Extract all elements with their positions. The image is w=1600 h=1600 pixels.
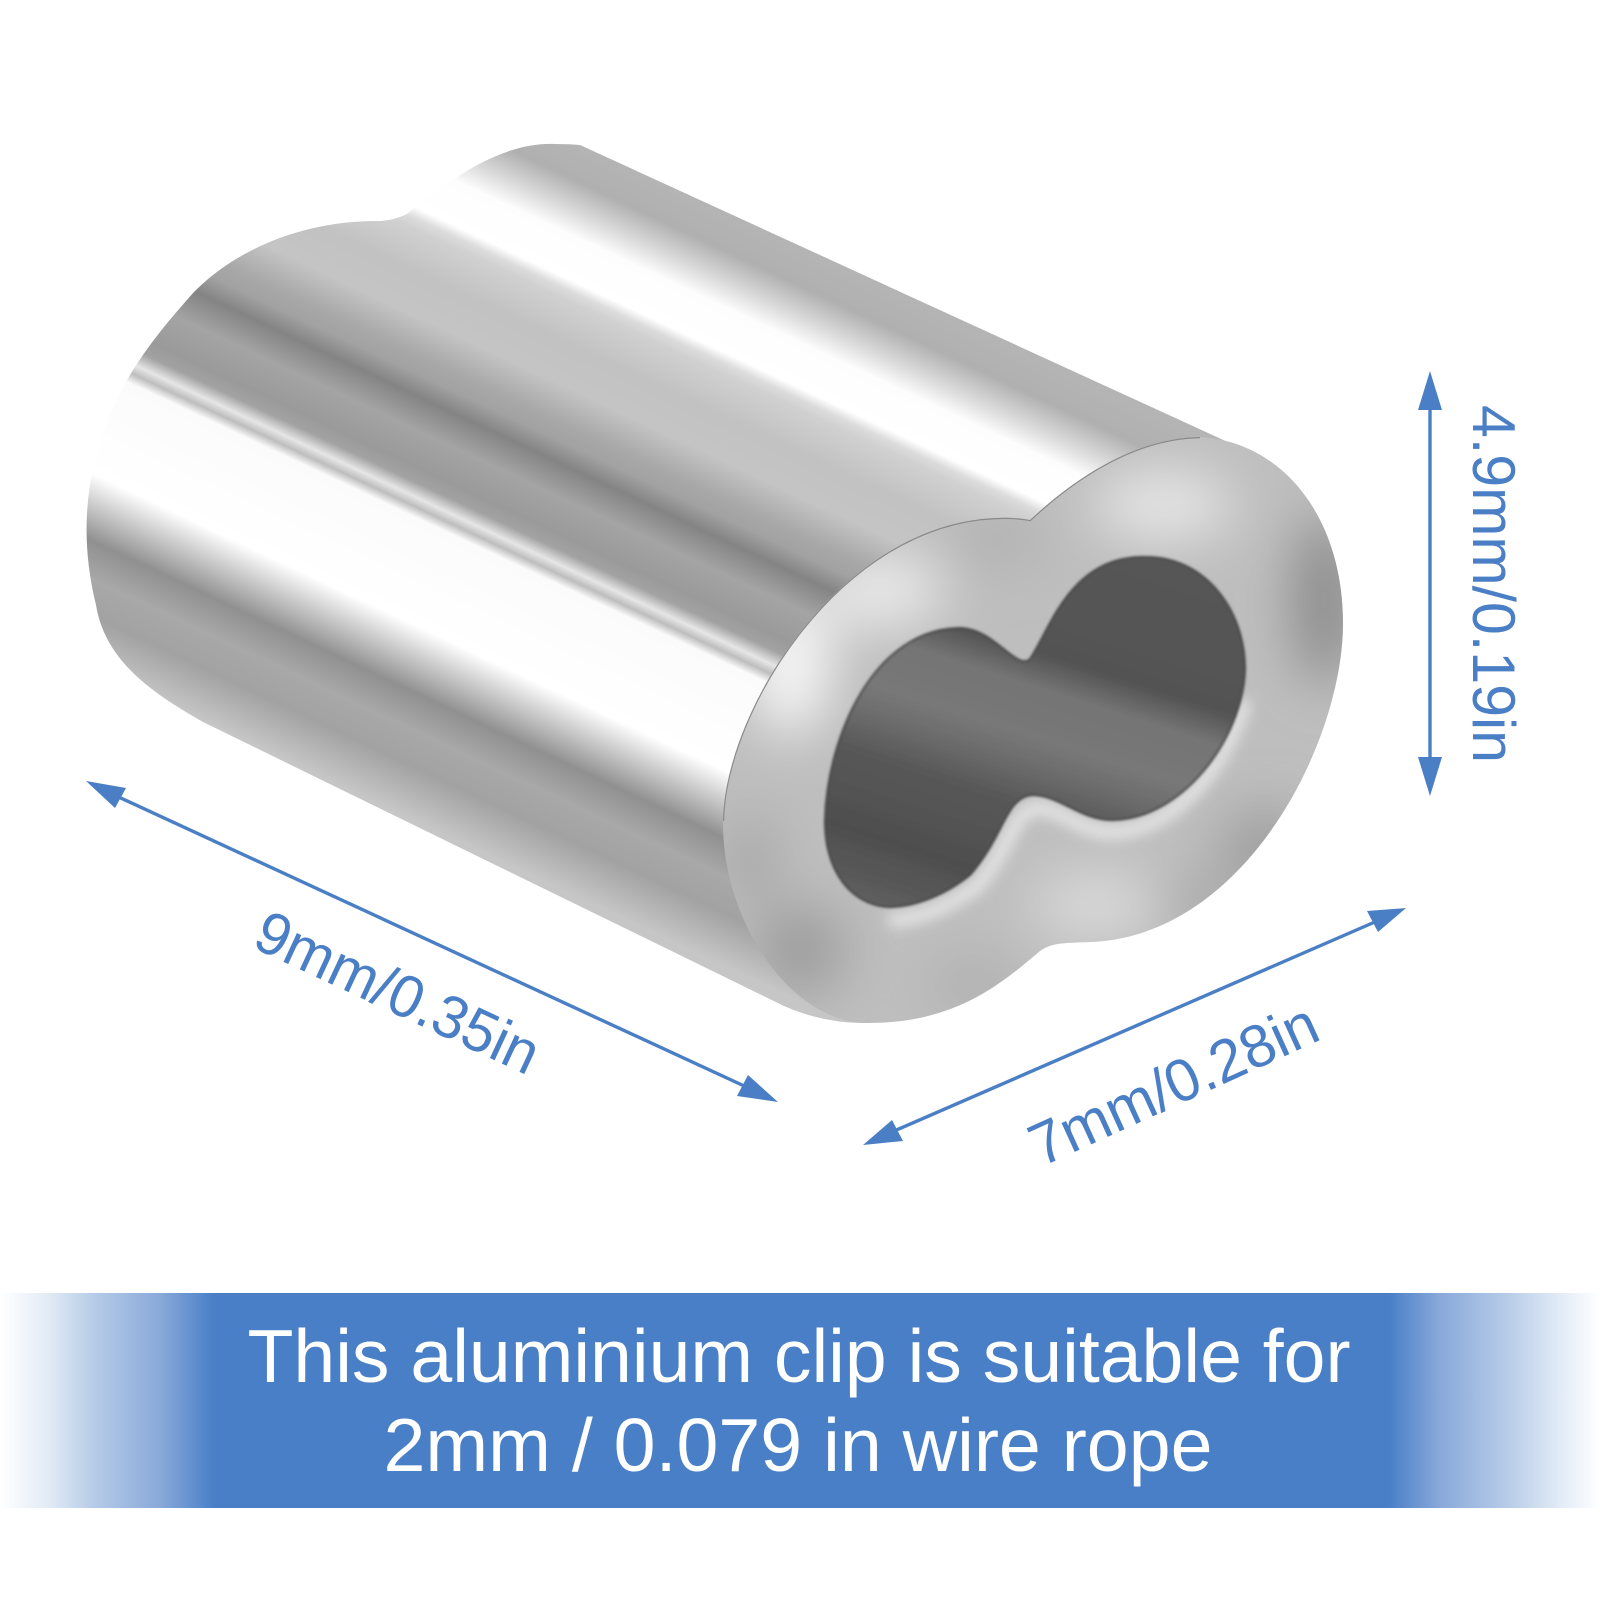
arrow: width dimension: [863, 908, 1406, 1145]
clip outer body: [87, 144, 1232, 1023]
aluminium clip illustration: [87, 144, 1360, 1040]
face edge line: [723, 437, 1200, 821]
label: height: 4.9mm/0.19in: [1460, 405, 1527, 763]
arrow: height dimension: [1418, 371, 1442, 796]
banner: [0, 1293, 1600, 1508]
banner background: [0, 1293, 1600, 1508]
label: width: 7mm/0.28in: [1019, 990, 1328, 1179]
banner text: 2mm / 0.079 in wire rope: [384, 1403, 1212, 1487]
rim highlight below hole: [889, 700, 1245, 920]
banner text: [248, 1314, 1350, 1487]
banner text: This aluminium clip is suitable for: [248, 1314, 1350, 1398]
clip front face: [723, 437, 1343, 1023]
arrow: length dimension: [86, 781, 778, 1102]
label: length: 9mm/0.35in: [245, 897, 550, 1087]
figure-eight hole: [825, 557, 1245, 907]
